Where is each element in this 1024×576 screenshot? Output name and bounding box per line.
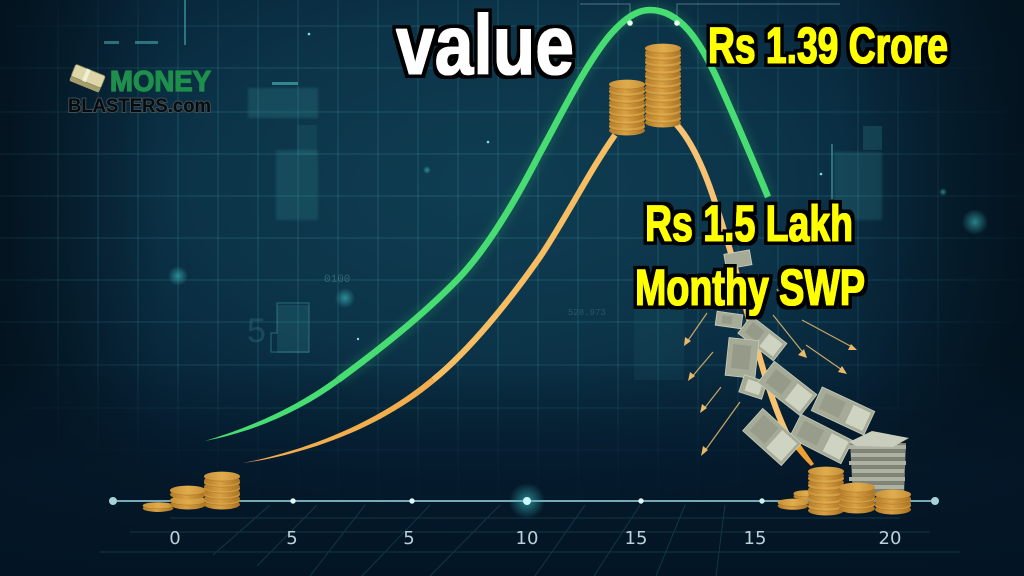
banknote stack: [849, 431, 909, 496]
callout: Rs 1.5 Lakh Monthy SWP: [635, 195, 865, 316]
axis labels: 20: [879, 528, 901, 549]
decorative data blocks: 528.973: [568, 308, 606, 318]
axis labels: [169, 528, 901, 549]
orange withdrawal curve: [243, 124, 814, 466]
decorative data blocks: 5: [247, 312, 266, 350]
coin stacks at peak: [609, 44, 681, 136]
callout: Rs 1.5 Lakh Monthy SWP: Monthy SWP: [635, 259, 865, 316]
logo: Money Blasters: MONEY: [110, 66, 211, 98]
logo: Money Blasters: [68, 64, 211, 117]
green value curve: [205, 10, 768, 441]
falling banknotes: [715, 250, 875, 466]
callout: Rs 1.5 Lakh Monthy SWP: Rs 1.5 Lakh: [645, 195, 853, 252]
axis labels: 10: [516, 528, 538, 549]
icon: banknote bundle: [69, 64, 106, 93]
decorative data blocks: 0100: [324, 274, 350, 286]
axis labels: 15: [625, 528, 647, 549]
axis labels: 5: [403, 528, 415, 549]
falling arrows: [684, 289, 857, 456]
logo: Money Blasters: BLASTERS.com: [68, 96, 211, 117]
axis labels: 15: [744, 528, 766, 549]
x axis: [109, 483, 939, 549]
axis labels: 0: [169, 528, 181, 549]
decorative data blocks: [104, 0, 988, 380]
coin stacks at end: [778, 467, 911, 516]
coin stacks at start: [143, 472, 240, 512]
axis labels: 5: [286, 528, 298, 549]
heading: value: value: [396, 0, 574, 92]
top bracket lines: [580, 4, 840, 20]
